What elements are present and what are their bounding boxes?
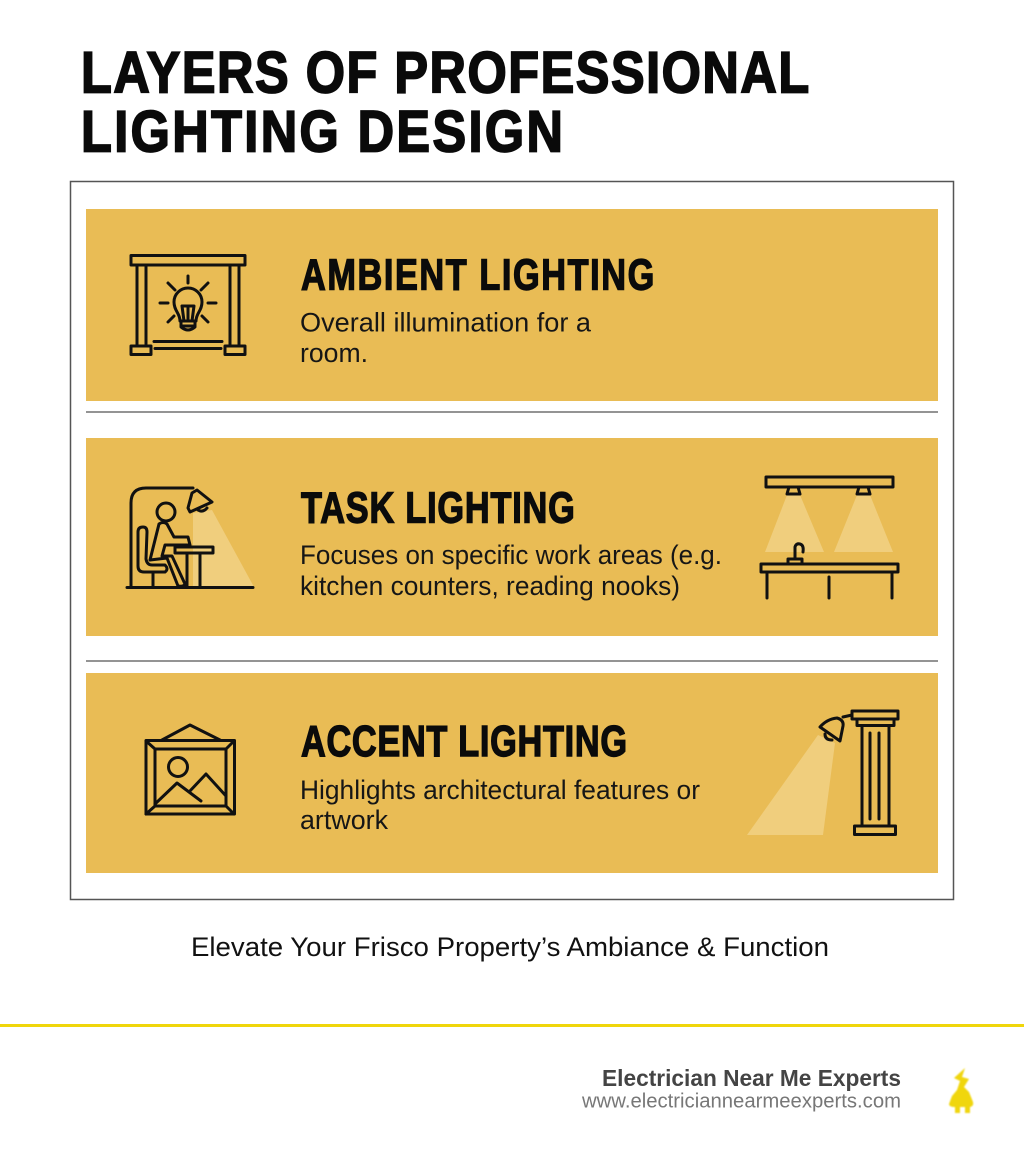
text: accent description: Highlights architectural features or [300, 775, 700, 805]
heading: task lighting: TASK LIGHTING [301, 483, 575, 533]
text: task description: Focuses on specific work areas (e.g. [300, 540, 722, 570]
title [81, 40, 809, 164]
title: LIGHTING DESIGN [81, 99, 563, 164]
icon: yellow plug with lightning bolt [949, 1068, 973, 1113]
icon: framed picture [146, 725, 234, 814]
panel: ambient lighting [86, 209, 938, 401]
outer frame panel [70, 182, 954, 900]
icon: column with spotlight [747, 711, 898, 835]
footer brand [581, 1065, 901, 1112]
text: ambient description: room. [300, 338, 368, 368]
footer brand: www.electriciannearmeexperts.com [581, 1090, 901, 1112]
caption: Elevate Your Frisco Property’s Ambiance & Function [191, 932, 829, 962]
text: ambient description: Overall illumination for a [300, 308, 592, 338]
icon: room with light bulb [131, 256, 245, 354]
text: ambient description [300, 308, 592, 368]
icon: person at desk with lamp [127, 488, 254, 588]
panel: accent lighting [86, 673, 938, 873]
heading: ambient lighting: AMBIENT LIGHTING [301, 250, 654, 300]
text: accent description: artwork [300, 805, 388, 835]
text: task description [300, 540, 722, 601]
heading: accent lighting: ACCENT LIGHTING [301, 717, 627, 766]
footer brand: Electrician Near Me Experts [602, 1065, 901, 1091]
text: task description: kitchen counters, reading nooks) [300, 571, 680, 601]
icon: kitchen counter with pendant lights [761, 477, 898, 598]
footer rule [0, 1024, 1024, 1027]
panel: task lighting [86, 438, 938, 636]
text: accent description [300, 775, 700, 835]
title: LAYERS OF PROFESSIONAL [81, 40, 809, 105]
